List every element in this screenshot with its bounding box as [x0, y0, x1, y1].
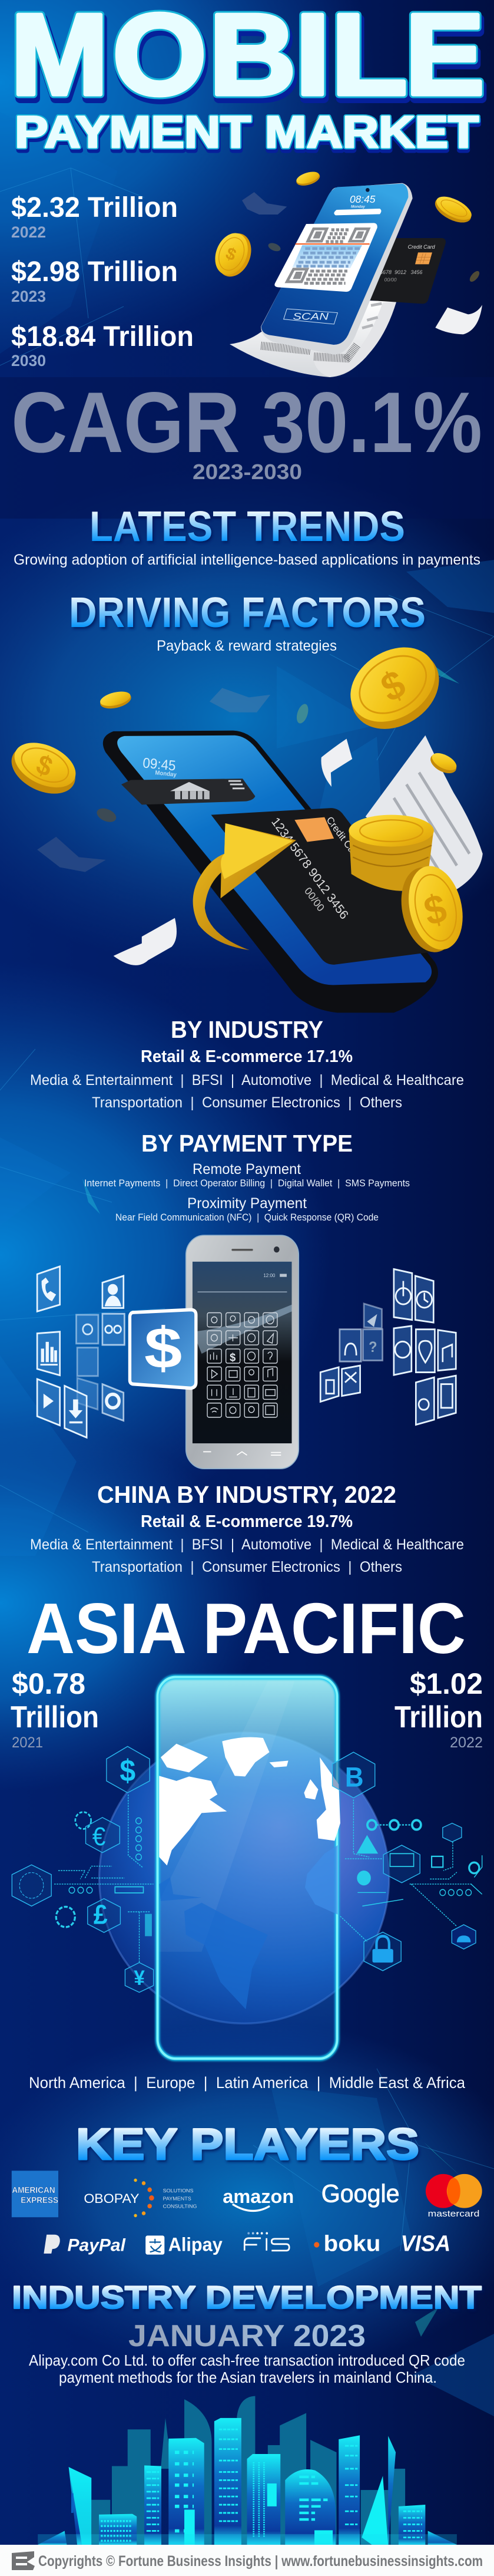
front buildings [38, 2418, 457, 2545]
circuit lines left [54, 1795, 154, 1962]
heading: BY INDUSTRY [171, 1016, 323, 1043]
logo: Amazon: amazon [223, 2185, 294, 2207]
section: by industry [30, 1016, 464, 1111]
stat: Asia Pacific 2021 [11, 1667, 99, 1751]
scan label [284, 309, 337, 324]
company logos [12, 2171, 482, 2256]
stat: Asia Pacific 2022: 2022 [450, 1734, 483, 1751]
coin left: $ [223, 244, 239, 265]
illustration: globe inside neon phone: € [92, 1822, 105, 1851]
heading: latest trends: LATEST TRENDS [91, 505, 406, 552]
receipt [230, 301, 396, 377]
latest trends text: Growing adoption of artificial intelligence-based applications in payments [14, 552, 480, 568]
logo: Google: Google [321, 2179, 400, 2208]
stat: Asia Pacific 2021: $0.78 [12, 1667, 85, 1700]
dollar tile: $ [144, 1316, 182, 1381]
illustration: futuristic city skyline [38, 2396, 457, 2545]
stat 2030: 2030 [11, 352, 46, 370]
heading: Asia Pacific: ASIA PACIFIC [26, 1588, 466, 1668]
other regions list: North America | Europe | Latin America | Middle East & Africa [29, 2074, 466, 2092]
stat 2022: 2022 [11, 223, 46, 241]
gold arrow [193, 823, 296, 950]
development text: payment methods for the Asian travelers in mainland China. [59, 2369, 437, 2386]
credit card: 00/00 [384, 276, 397, 282]
development text: Alipay.com Co Ltd. to offer cash-free transaction introduced QR code [29, 2351, 465, 2369]
logo: Obopay: PAYMENTS [163, 2196, 191, 2201]
coin small on receipt [427, 749, 459, 777]
stat 2030: $18.84 Trillion [11, 321, 194, 352]
coin left: $ [32, 748, 57, 783]
illustration: globe inside neon phone: $ [120, 1753, 135, 1787]
development date: JANUARY 2023 [128, 2319, 366, 2353]
phone [103, 731, 438, 1012]
silver phone: 12:00 [263, 1272, 276, 1278]
receipt top [321, 738, 352, 787]
illustration: smartphone with app icons [37, 1235, 456, 1469]
coin front right [393, 859, 471, 959]
illustration: globe inside neon phone [12, 1677, 482, 2059]
left floating icons [37, 1266, 124, 1437]
logo: PayPal [44, 2235, 126, 2255]
logo: PayPal: PayPal [68, 2235, 126, 2255]
receipt bottom [114, 918, 177, 965]
stat 2030 [11, 321, 194, 370]
phone body: Monday [351, 205, 365, 209]
segment list: Transportation | Consumer Electronics | Others [92, 1559, 402, 1575]
logo: Obopay: CONSULTING [163, 2204, 197, 2209]
segment list: Media & Entertainment | BFSI | Automotive | Medical & Healthcare [30, 1072, 464, 1089]
lock icon [372, 1936, 393, 1962]
segment list: Transportation | Consumer Electronics | Others [92, 1094, 402, 1111]
illustration: payback phone with card and coins [5, 632, 483, 1012]
market size stats [11, 192, 194, 370]
remote payment [84, 1161, 410, 1189]
segment list: Media & Entertainment | BFSI | Automotive | Medical & Healthcare [30, 1536, 464, 1553]
coin left [5, 734, 83, 803]
darker continents [159, 1845, 338, 2009]
phone: 09:45 [142, 755, 177, 774]
phone body: 08:45 [350, 193, 376, 205]
illustration: QR scan phone with coins and receipt [209, 169, 482, 377]
heading: key players: KEY PLAYERS [77, 2121, 420, 2171]
logo: American Express: EXPRESS [21, 2196, 58, 2205]
heading: driving factors: DRIVING FACTORS [71, 591, 426, 638]
footer bar [0, 2545, 494, 2576]
driving factors text: Payback & reward strategies [157, 638, 337, 654]
share: Retail & E-commerce 19.7% [141, 1512, 353, 1531]
stat: Asia Pacific 2022: $1.02 [410, 1667, 483, 1700]
stat: Asia Pacific 2022 [394, 1667, 483, 1751]
dollar tile [130, 1310, 196, 1388]
credit card: 5678 9012 3456 [380, 269, 422, 275]
bank bar [121, 779, 255, 804]
heading: key players: KEY PLAYERS [76, 2119, 419, 2169]
heading: BY PAYMENT TYPE [141, 1130, 353, 1157]
remote payment: Remote Payment [193, 1161, 301, 1177]
flying receipt [435, 305, 482, 334]
logo: Mastercard: mastercard [428, 2209, 479, 2219]
continents [159, 1737, 340, 1865]
illustration: smartphone with app icons: $ [230, 1351, 236, 1364]
circuit lines right [340, 1799, 482, 1942]
coin stack [349, 815, 434, 891]
title: MOBILE [11, 0, 486, 123]
stat 2023: $2.98 Trillion [11, 256, 178, 288]
receipt behind [366, 735, 483, 889]
heading: CHINA BY INDUSTRY, 2022 [97, 1481, 396, 1508]
QR card [274, 223, 377, 292]
credit card: Credit Card [408, 244, 436, 250]
illustration: smartphone with app icons: ? [369, 1339, 377, 1355]
stat 2023 [11, 256, 178, 305]
coin large top right [337, 632, 452, 744]
phone: Monday [155, 770, 177, 779]
illustration: globe inside neon phone: £ [94, 1900, 108, 1930]
credit card: 00/00 [302, 885, 327, 914]
globe [100, 1733, 389, 2023]
illustration: globe inside neon phone: ¥ [134, 1967, 145, 1990]
proximity payment: Proximity Payment [187, 1195, 307, 1212]
stat: Asia Pacific 2021: Trillion [11, 1700, 99, 1734]
stat 2022: $2.32 Trillion [11, 192, 178, 223]
footer logo [12, 2551, 35, 2570]
hexagon icons right [333, 1752, 476, 1971]
logo: American Express [12, 2171, 58, 2217]
logo: Obopay: OBOPAY [84, 2191, 140, 2206]
section: by payment type [84, 1130, 410, 1223]
segment list [30, 1536, 464, 1575]
heading: industry development: INDUSTRY DEVELOPMENT [12, 2279, 482, 2316]
share: Retail & E-commerce 17.1% [141, 1047, 353, 1066]
coin large top right: $ [374, 661, 412, 711]
logo: FIS [244, 2232, 289, 2251]
app icon grid [207, 1313, 277, 1417]
scan label: SCAN [293, 311, 329, 322]
logo: Obopay: SOLUTIONS [163, 2188, 194, 2194]
heading: industry development: INDUSTRY DEVELOPMENT [12, 2281, 483, 2317]
silver phone [186, 1235, 299, 1469]
credit card: 1234 5678 9012 3456 [268, 815, 351, 922]
credit card: Credit Card [324, 814, 363, 862]
remote payment: Internet Payments | Direct Operator Billing | Digital Wallet | SMS Payments [84, 1177, 410, 1189]
logo: American Express: AMERICAN [12, 2186, 55, 2195]
heading: driving factors: DRIVING FACTORS [69, 589, 426, 636]
logo: Mastercard [426, 2174, 482, 2219]
proximity payment: Near Field Communication (NFC) | Quick Response (QR) Code [115, 1212, 379, 1223]
coin small top left [99, 689, 132, 711]
proximity payment [115, 1195, 379, 1223]
segment list [30, 1072, 464, 1111]
credit card [367, 238, 446, 304]
logo: Obopay [84, 2179, 197, 2217]
title: PAYMENT MARKET: PAYMENT MARKET [15, 107, 479, 157]
coin front right: $ [420, 885, 451, 935]
stat: Asia Pacific 2022: Trillion [394, 1700, 483, 1734]
right floating icons [320, 1269, 456, 1425]
development text [29, 2351, 465, 2386]
coin right [431, 192, 475, 227]
phone body [261, 183, 413, 355]
heading: latest trends: LATEST TRENDS [89, 503, 405, 550]
logo: Alipay: Alipay [168, 2234, 223, 2255]
back buildings [91, 2396, 405, 2545]
stat: Asia Pacific 2021: 2021 [12, 1734, 43, 1751]
faint money and small coins [37, 688, 310, 872]
coin left [209, 227, 257, 282]
section: China by industry [30, 1481, 464, 1575]
credit card [211, 808, 446, 965]
logo: Visa: VISA [401, 2231, 450, 2256]
stat 2022 [11, 192, 178, 241]
hexagon icons left [12, 1746, 154, 1993]
CAGR period: 2023-2030 [193, 460, 302, 484]
logo: Boku: boku [324, 2231, 380, 2256]
dark small coins and money [242, 192, 481, 283]
title: PAYMENT MARKET: PAYMENT MARKET [16, 110, 479, 160]
building windows [101, 2429, 422, 2541]
stat 2023: 2023 [11, 288, 46, 305]
title: PAYMENT MARKET: PAYMENT MARKET [15, 107, 479, 157]
coin small top [294, 169, 321, 188]
illustration: globe inside neon phone: B [345, 1762, 364, 1793]
neon phone [158, 1677, 337, 2059]
